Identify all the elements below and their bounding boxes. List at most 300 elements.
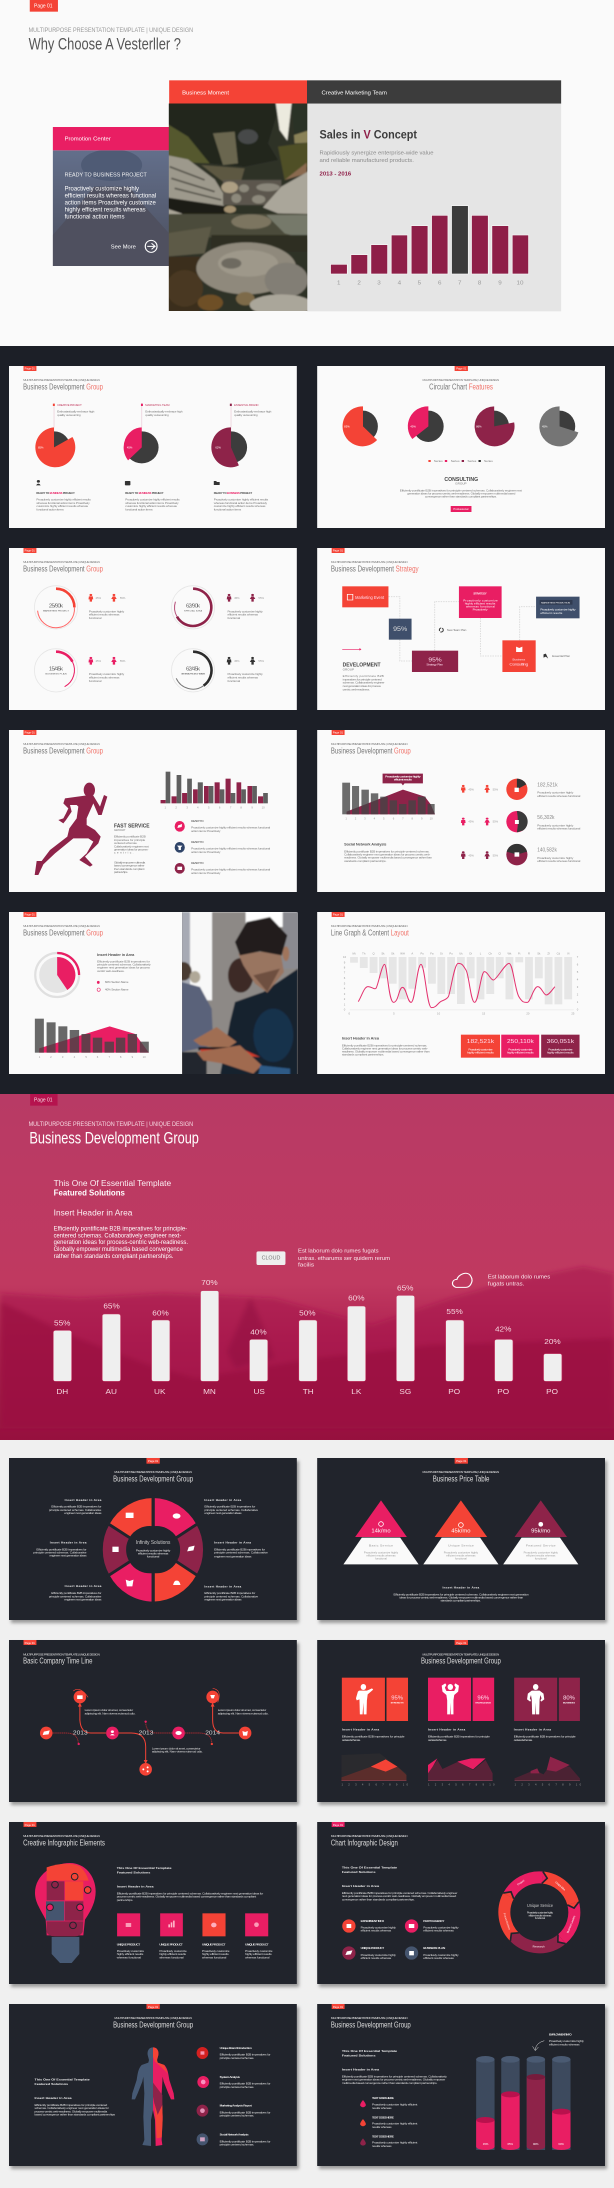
- callout: efficient results: [394, 778, 412, 782]
- slide: progress rings: Page 01: [25, 550, 35, 553]
- box: marketing event: [342, 586, 388, 607]
- ring diagram: [502, 1871, 579, 1948]
- line chart: Di: [469, 952, 472, 955]
- people stats: 45%: [468, 788, 475, 791]
- box: strategy plan: 95%: [428, 657, 442, 663]
- pyramid: basic: Basic Service: [369, 1544, 393, 1547]
- slide: timeline: Page 01: [25, 1642, 35, 1645]
- pie: 62%: ESSENTIAL BRAND: [234, 404, 259, 407]
- text: development: imperatives for principle centered: [343, 678, 382, 681]
- icon list: Proactively customize highly: [423, 1926, 459, 1930]
- slide: price table: Page 01: [456, 1460, 467, 1463]
- panel texts: Insert Header in Area: [428, 1728, 466, 1732]
- panel: strength: STRENGTH: [391, 1702, 404, 1704]
- line chart: Sk: [391, 952, 395, 955]
- heading: Business Development Group: [331, 2020, 411, 2029]
- line chart: WH: [400, 952, 405, 955]
- years: 2013: [73, 1730, 88, 1736]
- slide: ring chart design: MULTIPURPOSE PRESENTATION TEMPLATE | UNIQUE DESIGN: [331, 1834, 408, 1838]
- stat texts: efficient results whereas functional: [537, 859, 581, 863]
- list with icons: System Analysis: [220, 2075, 240, 2079]
- pyramid: featured: Proactively customize highly: [524, 1551, 559, 1554]
- bar chart labels: 6: [438, 281, 441, 286]
- heading: Business Development Group: [113, 1474, 193, 1483]
- legend: Series: [451, 459, 460, 463]
- pie: 62%: quality outsourcing: [234, 413, 258, 417]
- bar chart labels: 10: [517, 281, 523, 286]
- slide: silhouettes and area charts: Page 01: [456, 1642, 467, 1645]
- text: social network: readiness. Globally empower multimedia based convergence rather than: [344, 856, 432, 860]
- bar chart: countries: [53, 1279, 562, 1396]
- heading: Creative Infographic Elements: [23, 1838, 105, 1847]
- product squares: [117, 1913, 273, 1959]
- list with icons: Efficiently pontificate B2B imperatives for: [220, 2082, 271, 2086]
- bar chart: countries: UK: [154, 1388, 165, 1396]
- ring: general project teams: [172, 649, 215, 692]
- line chart: Wk: [507, 952, 512, 955]
- text: cloud note 2: [488, 1274, 550, 1287]
- product squares: Proactively customize: [245, 1949, 273, 1953]
- slide: price table: [317, 1458, 605, 1620]
- text: development: GROUP: [343, 668, 354, 671]
- text: social network: [344, 843, 432, 863]
- wheel icons: [112, 1513, 195, 1586]
- panel texts: [342, 1728, 576, 1742]
- ring: marketing project: MARKETING PROJECT: [43, 609, 70, 612]
- text: development: Efficiently pontificate B2B: [343, 674, 384, 678]
- project texts: whereas functional action items Proactively: [125, 501, 179, 505]
- list with icons: Efficiently pontificate B2B imperatives for: [220, 2053, 271, 2057]
- product squares: Proactively customize: [117, 1949, 145, 1953]
- text: featured solutions: process-centric web-readiness. Globally empower multimedia based convergence rather than standards compliant: [117, 1895, 256, 1899]
- ring: marketing project: [34, 586, 78, 629]
- text block: featured solutions: generation ideas for process-centric web-readiness.: [54, 1239, 188, 1246]
- text blocks around wheel: Insert Header in Area: [65, 1584, 102, 1588]
- project texts: functional action items: [36, 508, 64, 511]
- line chart: Cl: [498, 952, 501, 955]
- text: featured solutions: [117, 1866, 263, 1902]
- box: business consulting: [502, 640, 536, 672]
- combo chart: 10: [143, 1056, 146, 1059]
- cylinder: 65%: 65%: [507, 2143, 514, 2146]
- arrow: [342, 648, 361, 651]
- slide: runner: MULTIPURPOSE PRESENTATION TEMPLATE | UNIQUE DESIGN: [23, 742, 100, 746]
- text: insert header: [342, 1037, 430, 1057]
- bar chart: countries: SG: [399, 1388, 411, 1396]
- list with drops: TEXT GOES HERE: [372, 2096, 394, 2100]
- project texts: whereas functional action items Proactively: [214, 501, 268, 505]
- panel: promotion center card: action items Proactively customize: [65, 200, 156, 206]
- pie charts row: 45%: [410, 426, 417, 429]
- text blocks around wheel: Efficiently pontificate B2B imperatives for: [214, 1548, 265, 1551]
- panel: business: 80%: [563, 1696, 575, 1701]
- line chart: Uk: [459, 952, 463, 955]
- pie: 45%: [124, 403, 183, 463]
- panel: knowledge: 96%: [477, 1696, 489, 1701]
- text: insert header: ideas for process-centric web-readiness. Globally empower multimedia based convergence rather than: [399, 1596, 524, 1600]
- project texts: customize highly efficient results whereas: [214, 504, 266, 508]
- timeline connectors: [52, 1688, 239, 1764]
- panel: strength: 95%: [391, 1696, 403, 1701]
- cylinder: 45%: 45%: [483, 2143, 489, 2146]
- people stats: 55%: [258, 597, 265, 600]
- text: featured solutions: This One Of Essential Template: [342, 2049, 398, 2053]
- pyramid: unique: 45k/mo: [451, 1529, 470, 1534]
- text: insert header: Insert Header in Area: [442, 1586, 480, 1590]
- ring labels: Project: [516, 1878, 526, 1886]
- button: Professional: [453, 508, 469, 511]
- years: 2014: [205, 1730, 221, 1736]
- legend: Series: [484, 459, 493, 463]
- project texts: Proactively customize highly efficient results: [214, 498, 269, 502]
- slide: development strategy flow: [317, 548, 605, 710]
- stat texts: 140,582k: [537, 848, 557, 853]
- people stats: 45%: [96, 660, 102, 663]
- slide: circular chart features: Page 01: [456, 368, 467, 371]
- line chart: 6: [344, 977, 346, 980]
- text: featured solutions: Efficiently pontificate B2B imperatives for principle centered schemas. Collaboratively engineer next generation ideas for: [117, 1892, 263, 1896]
- panel texts: centered schemas.: [428, 1738, 447, 1742]
- combo chart: 6: [393, 818, 395, 821]
- box: business consulting: Consulting: [509, 662, 529, 666]
- list with drops: results whereas: [372, 2106, 392, 2110]
- icon list: PHOTO AGENCY: [423, 1919, 445, 1923]
- product squares: highly efficient results: [245, 1952, 272, 1956]
- combo chart: 9: [421, 818, 423, 821]
- icon list: Proactively customize highly: [361, 1953, 396, 1957]
- pyramid: featured: 95k/mo: [531, 1529, 550, 1534]
- box: strategy plan: Strategy Plan: [426, 663, 443, 667]
- text blocks around wheel: principle centered schemas. Collaborative: [214, 1551, 268, 1555]
- line chart: 7: [577, 956, 579, 959]
- panel: promotion center card: highly efficient results whereas: [65, 207, 146, 213]
- line chart: St: [440, 952, 443, 955]
- list with icons: Proactively customize highly efficient results whereas functional: [191, 847, 271, 851]
- list with icons: principle centered schemas.: [220, 2143, 254, 2147]
- project texts: functional action items: [214, 508, 242, 511]
- list with drops: Proactively customize highly efficient: [372, 2141, 418, 2145]
- ring: general project teams: GENERAL PROJECT TEAMS: [181, 672, 206, 675]
- axis ticks: [341, 1783, 582, 1786]
- heading: Business Development Strategy: [331, 564, 419, 573]
- text: featured solutions: schemas. Collaboratively engineer next generation ideas for: [34, 2106, 109, 2110]
- slide: human body: MULTIPURPOSE PRESENTATION TEMPLATE | UNIQUE DESIGN: [114, 2016, 192, 2020]
- ring: special idea: SPECIAL IDEA: [184, 609, 203, 612]
- list with icons: principle centered schemas.: [220, 2056, 254, 2060]
- ring center text: functional: [535, 1916, 545, 1920]
- bar chart: countries: 55%: [446, 1308, 463, 1316]
- panel: promotion center card: efficient results whereas functional: [65, 193, 157, 199]
- callout: [383, 774, 423, 785]
- line chart: Zf: [547, 952, 550, 955]
- text block: featured solutions: Globally empower multimedia based convergence: [54, 1246, 183, 1253]
- combo chart: 5: [85, 1056, 88, 1059]
- text: cloud note 2: Est laborum dolo rumes: [488, 1274, 550, 1280]
- slide: pie charts with projects: MULTIPURPOSE PRESENTATION TEMPLATE | UNIQUE DESIGN: [23, 378, 100, 382]
- page badge: [30, 1094, 58, 1106]
- text: fast service: than standards compliant: [114, 867, 145, 871]
- panel texts: Efficiently pontificate B2B imperatives for principle: [514, 1735, 576, 1739]
- pyramid: unique: efficient results whereas: [446, 1554, 476, 1557]
- icon list: efficient results whereas: [423, 1929, 454, 1933]
- text block: 2013 - 2016: [320, 171, 352, 177]
- people stats: Proactively customize highly: [228, 672, 263, 676]
- legend: Series: [434, 459, 443, 463]
- bar chart labels: 5: [418, 281, 421, 286]
- pie charts row: [343, 406, 578, 446]
- list with drops: TEXT GOES HERE: [372, 2135, 394, 2138]
- list with icons: Efficiently pontificate B2B imperatives for: [220, 2140, 271, 2143]
- slide: human body: [9, 2004, 297, 2166]
- line chart: Cd: [557, 952, 561, 955]
- section: pink business development: [0, 1094, 614, 1440]
- text: cloud note 2: fugats untras.: [488, 1281, 525, 1287]
- timeline notes: Lorem ipsum dolor sit amet, consectetur: [152, 1747, 201, 1750]
- line chart: R: [528, 952, 530, 955]
- ring: business plan: BUSINESS PLAN: [45, 672, 67, 675]
- text: featured solutions: Featured Solutions: [342, 2054, 376, 2057]
- text: featured solutions: Featured Solutions: [34, 2082, 69, 2086]
- bar chart: countries: DH: [56, 1388, 68, 1396]
- area chart: crimson: [515, 1757, 580, 1781]
- cylinder: 45%: [476, 2056, 495, 2150]
- bar chart: countries: 65%: [103, 1302, 120, 1310]
- stat box: crimson: 360,051k: [547, 1038, 575, 1045]
- cylinder: 60%: 60%: [558, 2143, 565, 2146]
- bulb puzzle: [35, 1863, 96, 1963]
- text: featured solutions: [342, 1866, 457, 1901]
- stat texts: 56,302k: [537, 815, 555, 821]
- slide: light bulb puzzle: MULTIPURPOSE PRESENTATION TEMPLATE | UNIQUE DESIGN: [23, 1834, 100, 1838]
- pie: 62%: Enthusiastically embrace high: [234, 410, 272, 414]
- icon: arrow button: [145, 240, 157, 252]
- text: fast service: GROUP: [114, 828, 125, 832]
- text: cloud note: Est laborum dolo rumes fugats: [298, 1248, 379, 1254]
- bar chart: countries: MN: [203, 1388, 216, 1396]
- section background: dark slides: [0, 346, 614, 1094]
- text: featured solutions: engineer next generation ideas for process-centric web-readiness. Globally empower: [342, 2078, 445, 2082]
- text: development: DEVELOPMENT: [343, 662, 381, 668]
- list with icons: Proactively customize highly efficient results whereas functional: [191, 868, 271, 872]
- line chart: Pu: [449, 952, 453, 955]
- ring: business plan: [34, 649, 78, 692]
- slide: infinity solutions: MULTIPURPOSE PRESENTATION TEMPLATE | UNIQUE DESIGN: [114, 1470, 192, 1474]
- panel texts: Efficiently pontificate B2B imperatives for principle: [428, 1735, 490, 1739]
- line chart: 9: [344, 961, 346, 964]
- panel: business moment: Business Moment: [182, 90, 229, 96]
- bar chart: grouped: 2: [175, 806, 178, 809]
- pie: 45%: 45%: [127, 447, 133, 450]
- text: fast service: FAST SERVICE: [114, 824, 150, 829]
- line chart: 0: [344, 1009, 346, 1012]
- text: development: [343, 662, 385, 691]
- text: cloud note: facilis: [298, 1262, 314, 1268]
- icon list: EXPERIMENT INFO: [361, 1919, 385, 1923]
- icon list: Proactively customize highly: [361, 1926, 396, 1930]
- bar chart labels: [337, 281, 523, 286]
- text: consulting: CONSULTING: [444, 477, 479, 483]
- people stats: 55%: [493, 854, 499, 857]
- combo chart: 6: [97, 1056, 99, 1059]
- text: featured solutions: Insert Header in Area: [117, 1885, 154, 1889]
- product squares: Proactively customize: [202, 1949, 230, 1953]
- slide: chart and stats: [317, 730, 605, 892]
- human body figure: [132, 2047, 174, 2146]
- years: 2013: [139, 1730, 154, 1736]
- ring: business plan: 15/45k: [49, 667, 63, 672]
- bar chart: countries: 50%: [299, 1309, 316, 1317]
- bar chart: countries: 60%: [152, 1309, 169, 1317]
- pie: 45%: MARKETING TEAM: [145, 404, 170, 407]
- page badge: Page 01: [34, 1098, 52, 1103]
- text: fast service: [114, 824, 150, 874]
- box: marketing event: Marketing Event: [355, 595, 385, 601]
- list with icons: action items Proactively: [191, 829, 221, 833]
- people stats: 55%: [493, 821, 499, 824]
- panel texts: Efficiently pontificate B2B imperatives for principle: [342, 1735, 405, 1739]
- text: featured solutions: Insert Header in Area: [342, 1884, 380, 1888]
- text: featured solutions: Featured Solutions: [117, 1871, 151, 1875]
- panel: knowledge: KNOWLEDGE: [475, 1702, 492, 1704]
- callout: efficient results whereas: [549, 2043, 580, 2046]
- heading: Basic Company Time Line: [23, 1656, 92, 1665]
- line chart: 15: [482, 1013, 486, 1016]
- ring center text: [527, 1903, 554, 1920]
- product squares: whereas functional: [202, 1956, 227, 1959]
- slide: infinity solutions: [9, 1458, 297, 1620]
- slide: pie charts with projects: Page 01: [25, 368, 35, 371]
- slide: human body: Page 01: [148, 2006, 159, 2009]
- line chart: 25: [571, 1013, 575, 1016]
- slide: ring chart design: Page 01: [333, 1824, 344, 1827]
- combo chart: 9: [132, 1056, 134, 1059]
- pie charts row: 86%: [476, 426, 482, 429]
- project texts: [36, 480, 269, 511]
- panel: creative marketing team: Creative Marketing Team: [321, 90, 387, 96]
- project texts: READY TO BUSINESS PROJECT: [214, 492, 253, 495]
- slide: pie and photo: [9, 912, 297, 1074]
- text: insert header: Efficiently pontificate B2B imperatives for principle centered schemas. Collaboratively engineer next generation: [394, 1593, 529, 1597]
- heading: Business Development Group: [29, 1129, 199, 1147]
- stat box: pink: highly efficient results: [507, 1051, 534, 1055]
- text: insert header: Efficiently pontificate B2B imperatives for principle-centered schemas.: [342, 1044, 427, 1047]
- people stats: functional: [89, 679, 102, 683]
- list with icons: [175, 819, 271, 875]
- legend: [97, 980, 129, 991]
- line chart: Th: [362, 952, 366, 955]
- icon list: BUSINESS PLAN: [423, 1946, 445, 1950]
- list with drops: results whereas: [372, 2144, 392, 2148]
- panel: sales concept: [307, 104, 561, 311]
- slide: runner: [9, 730, 297, 892]
- line chart: 2: [344, 998, 346, 1001]
- project texts: whereas functional action items Proactively: [36, 501, 90, 505]
- slide: silhouettes and area charts: MULTIPURPOSE PRESENTATION TEMPLATE | UNIQUE DESIGN: [423, 1653, 499, 1656]
- text blocks around wheel: principle centered schemas. Collaborative: [49, 1595, 102, 1598]
- button: [451, 506, 471, 512]
- list with drops: TEXT GOES HERE: [372, 2116, 394, 2119]
- line chart: 1: [577, 1001, 579, 1004]
- bar chart: grouped: 6: [219, 806, 221, 809]
- axis ticks: 1 2 3 4 5 6 7 8 9 10: [428, 1783, 495, 1786]
- panel: promotion center card: Proactively customize highly: [65, 186, 140, 192]
- people stats: 45%: [468, 854, 475, 857]
- text: featured solutions: Insert Header in Area: [342, 2068, 380, 2071]
- wheel center text: [136, 1539, 171, 1558]
- slide: line graph: Page 01: [333, 914, 344, 917]
- text: featured solutions: next generation ideas for process-centric web-readiness. Globally empower multimedia based: [342, 1894, 457, 1898]
- box: strategy: [459, 586, 502, 618]
- slide: circular chart features: [317, 366, 605, 528]
- bar chart: countries: 60%: [348, 1294, 365, 1302]
- bar chart: grouped: 5: [208, 806, 210, 809]
- pie: 85%: quality outsourcing: [57, 413, 81, 417]
- text: cloud note: [298, 1248, 390, 1268]
- page badge: [30, 0, 58, 12]
- bar chart: countries: PO: [497, 1388, 509, 1396]
- list with drops: Proactively customize highly efficient: [372, 2122, 418, 2126]
- text: featured solutions: Efficiently pontificate B2B imperatives for principle centered: [34, 2103, 108, 2107]
- box: strategy: highly efficient results: [465, 602, 496, 605]
- people stats: efficient results whereas: [228, 613, 259, 617]
- timeline notes: Lorem ipsum dolor sit amet, consectetur: [218, 1708, 266, 1712]
- ring: marketing project: 25/90k: [49, 604, 63, 609]
- icon: cloud: [452, 1273, 472, 1287]
- text blocks around wheel: Insert Header in Area: [50, 1541, 87, 1545]
- text block: featured solutions: Featured Solutions: [54, 1188, 125, 1197]
- heading: Business Development Group: [421, 1656, 501, 1665]
- text: fast service: based convergence rather: [114, 864, 145, 868]
- people stats: Proactively customize highly: [228, 610, 263, 613]
- text blocks around wheel: engineer next generation ideas: [64, 1511, 102, 1515]
- pyramid: unique: Proactively customize highly: [444, 1551, 479, 1554]
- stat box: red: highly efficient results: [467, 1051, 494, 1055]
- list with drops: [360, 2096, 418, 2148]
- ring labels: Business Leaders: [566, 1914, 577, 1934]
- text blocks around wheel: engineer next generation ideas: [204, 1598, 242, 1601]
- line chart: 5: [344, 982, 346, 985]
- box: strategy: whereas functional: [466, 605, 495, 608]
- bar chart labels: 9: [498, 281, 502, 286]
- text blocks around wheel: Insert Header in Area: [204, 1498, 242, 1502]
- heading: Business Development Group: [23, 564, 103, 573]
- panel texts: centered schemas.: [514, 1738, 533, 1742]
- people stats: Proactively customize highly: [89, 672, 125, 676]
- line chart: 5: [577, 971, 579, 974]
- pie charts row: 45%: [542, 426, 548, 429]
- slide: chart and stats: Page 01: [333, 732, 344, 735]
- box: marketing promotion: [536, 597, 580, 618]
- project texts: READY TO BUSINESS PROJECT: [125, 492, 164, 495]
- product squares: Proactively customize: [159, 1949, 187, 1953]
- legend: 60% Section Name: [105, 980, 129, 984]
- slide: progress rings: [9, 548, 297, 710]
- ring: general project teams: 62/45k: [186, 667, 200, 672]
- line chart: 6: [577, 964, 579, 967]
- line chart: 7: [344, 972, 346, 975]
- line chart: Sk: [537, 952, 541, 955]
- stat texts: 182,521k: [537, 783, 558, 788]
- box: marketing promotion: efficient results: [540, 611, 563, 615]
- combo chart: 2: [50, 1056, 52, 1059]
- people stats: functional: [228, 616, 240, 620]
- stat box: red: Proactively customize: [468, 1048, 493, 1052]
- text: featured solutions: This One Of Essential Template: [342, 1866, 398, 1869]
- pyramid: featured: Featured Service: [526, 1544, 556, 1547]
- bar chart: countries: PO: [448, 1388, 460, 1396]
- wheel center text: efficient results whereas: [138, 1552, 169, 1555]
- pie: 62%: [211, 403, 272, 467]
